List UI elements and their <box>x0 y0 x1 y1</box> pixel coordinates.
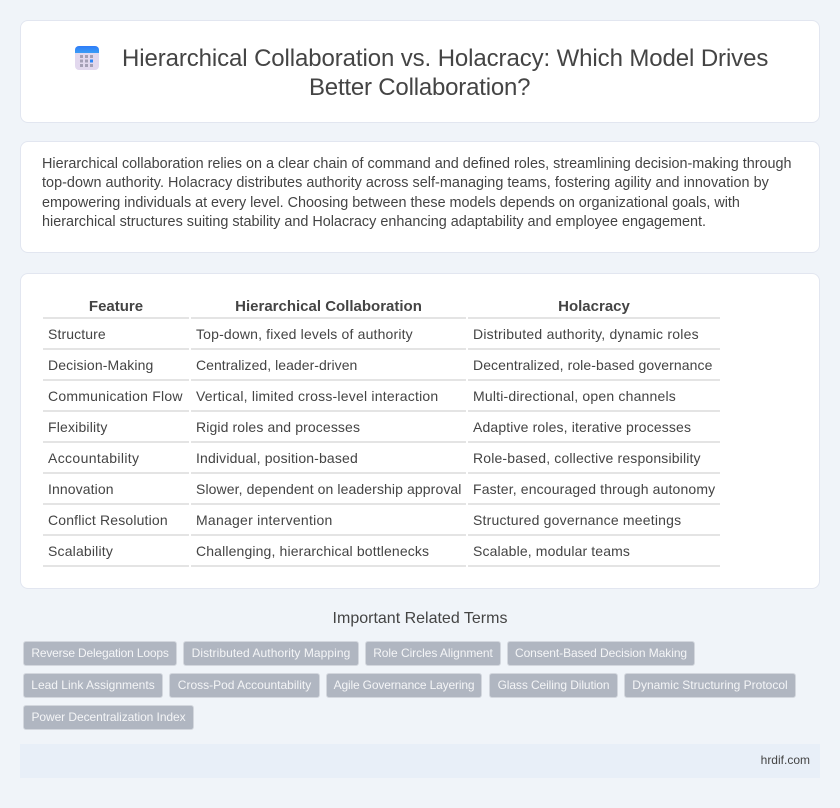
related terms tags: Glass Ceiling Dilution <box>498 678 609 692</box>
intro text: hierarchical structures suiting stability and Holacracy enhancing adaptability and employee engagement. <box>42 214 706 230</box>
related terms tags: Cross-Pod Accountability <box>178 678 311 692</box>
intro text: top-down authority. Holacracy distributes authority across self-managing teams, fostering agility and innovation by <box>42 175 769 191</box>
comparison table: Slower, dependent on leadership approval <box>196 481 462 497</box>
comparison table: Challenging, hierarchical bottlenecks <box>196 543 429 559</box>
related terms tags: Agile Governance Layering <box>334 678 474 692</box>
comparison table: Scalable, modular teams <box>473 543 630 559</box>
comparison table: Centralized, leader-driven <box>196 357 357 373</box>
footer bar <box>20 744 820 778</box>
related terms tags: Dynamic Structuring Protocol <box>632 678 788 692</box>
comparison table: Rigid roles and processes <box>196 419 360 435</box>
icon: calendar <box>75 46 99 70</box>
title: Hierarchical Collaboration vs. Holacracy: Which Model Drives <box>122 45 768 72</box>
comparison table: Structured governance meetings <box>473 512 681 528</box>
comparison table: Adaptive roles, iterative processes <box>473 419 691 435</box>
title <box>122 45 768 101</box>
comparison table: Communication Flow <box>48 388 183 404</box>
comparison table: Flexibility <box>48 419 108 435</box>
comparison table: Multi-directional, open channels <box>473 388 676 404</box>
related terms heading: Important Related Terms <box>333 610 507 627</box>
comparison table: Decentralized, role-based governance <box>473 357 712 373</box>
comparison table: Top-down, fixed levels of authority <box>196 326 413 342</box>
comparison table: Vertical, limited cross-level interaction <box>196 388 438 404</box>
title panel <box>20 20 820 123</box>
related terms tags: Reverse Delegation Loops <box>31 646 169 660</box>
comparison table: Accountability <box>48 450 139 466</box>
title: Better Collaboration? <box>309 74 530 101</box>
comparison table: Hierarchical Collaboration <box>235 298 422 315</box>
intro panel <box>20 141 820 253</box>
related terms tags: Lead Link Assignments <box>31 678 155 692</box>
related terms tags: Consent-Based Decision Making <box>515 646 687 660</box>
comparison table: Individual, position-based <box>196 450 358 466</box>
comparison table: Structure <box>48 326 106 342</box>
footer source: hrdif.com <box>761 753 810 767</box>
comparison table <box>43 298 720 567</box>
related terms tags: Power Decentralization Index <box>31 710 186 724</box>
comparison table: Innovation <box>48 481 114 497</box>
comparison table: Manager intervention <box>196 512 333 528</box>
comparison table: Distributed authority, dynamic roles <box>473 326 699 342</box>
table panel <box>20 273 820 589</box>
comparison table: Conflict Resolution <box>48 512 168 528</box>
comparison table: Faster, encouraged through autonomy <box>473 481 715 497</box>
related terms tags: Role Circles Alignment <box>373 646 493 660</box>
related terms tags: Distributed Authority Mapping <box>192 646 350 660</box>
related terms tags <box>23 641 796 730</box>
comparison table: Decision-Making <box>48 357 153 373</box>
intro text: empowering individuals at every level. Choosing between these models depends on organizational goals, with <box>42 195 740 211</box>
comparison table: Scalability <box>48 543 113 559</box>
comparison table: Role-based, collective responsibility <box>473 450 701 466</box>
comparison table: Feature <box>89 298 143 315</box>
intro text: Hierarchical collaboration relies on a clear chain of command and defined roles, streamlining decision-making through <box>42 156 792 172</box>
comparison table: Holacracy <box>558 298 630 315</box>
intro text <box>42 156 792 230</box>
